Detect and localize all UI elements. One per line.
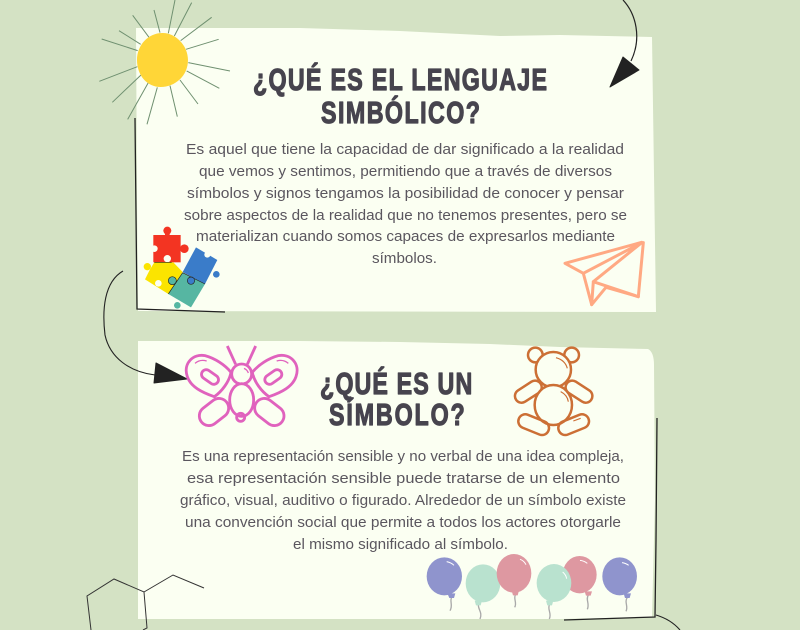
- balloon purple 1: [427, 557, 462, 611]
- body text 1: [184, 142, 627, 267]
- icon: balloons: [427, 554, 637, 619]
- icon: teddy bear: [512, 348, 595, 437]
- balloon rose 2: [563, 556, 597, 609]
- arrow: left curve: [104, 271, 187, 383]
- icon: puzzle: [144, 227, 220, 309]
- icon: sun: [99, 0, 230, 124]
- body text 1: Es aquel que tiene la capacidad de dar significado a la realidad: [186, 142, 624, 158]
- heading 1: SIMBÓLICO?: [321, 95, 480, 130]
- balloon rose 1: [497, 554, 531, 607]
- arrow: bottom right curve: [656, 615, 680, 630]
- panel: what is a symbol: [138, 341, 657, 620]
- body text 1: símbolos.: [372, 251, 437, 267]
- puzzle piece yellow: [144, 255, 183, 294]
- body text 1: que vemos y sentimos, permitiendo que a través de diversos: [199, 164, 612, 180]
- panel: what is symbolic language: [135, 28, 656, 312]
- puzzle piece blue: [183, 247, 220, 284]
- puzzle piece green: [168, 273, 205, 309]
- body text 2: [180, 449, 626, 553]
- icon: butterfly: [186, 346, 297, 429]
- icon: paper plane: [565, 242, 643, 305]
- body text 1: símbolos y signos tengamos la posibilidad de conocer y pensar: [187, 186, 624, 202]
- balloon purple 2: [602, 557, 637, 611]
- panel background 1: [136, 28, 656, 312]
- decorative sketch: bottom left lines: [87, 575, 204, 630]
- body text 2: gráfico, visual, auditivo o figurado. Alrededor de un símbolo existe: [180, 493, 626, 509]
- panel background 2: [138, 341, 655, 619]
- sketched border 1: [135, 118, 225, 312]
- heading 2: [320, 366, 472, 432]
- arrow: top right: [610, 0, 639, 87]
- heading 1: [253, 62, 547, 130]
- balloon mint 1: [466, 564, 500, 619]
- body text 1: materializan cuando somos capaces de expresarlos mediante: [196, 229, 615, 245]
- balloon mint 2: [537, 564, 571, 619]
- body text 2: Es una representación sensible y no verbal de una idea compleja,: [182, 449, 624, 465]
- sketched border 2: [564, 418, 657, 620]
- body text 1: sobre aspectos de la realidad que no tenemos presentes, pero se: [184, 208, 627, 224]
- puzzle piece red: [151, 227, 189, 262]
- heading 2: ¿QUÉ ES UN: [320, 366, 472, 401]
- body text 2: el mismo significado al símbolo.: [293, 537, 508, 553]
- body text 2: esa representación sensible puede tratarse de un elemento: [187, 471, 620, 487]
- heading 1: ¿QUÉ ES EL LENGUAJE: [253, 62, 547, 97]
- body text 2: una convención social que permite a todos los actores otorgarle: [185, 515, 621, 531]
- heading 2: SÍMBOLO?: [329, 397, 465, 432]
